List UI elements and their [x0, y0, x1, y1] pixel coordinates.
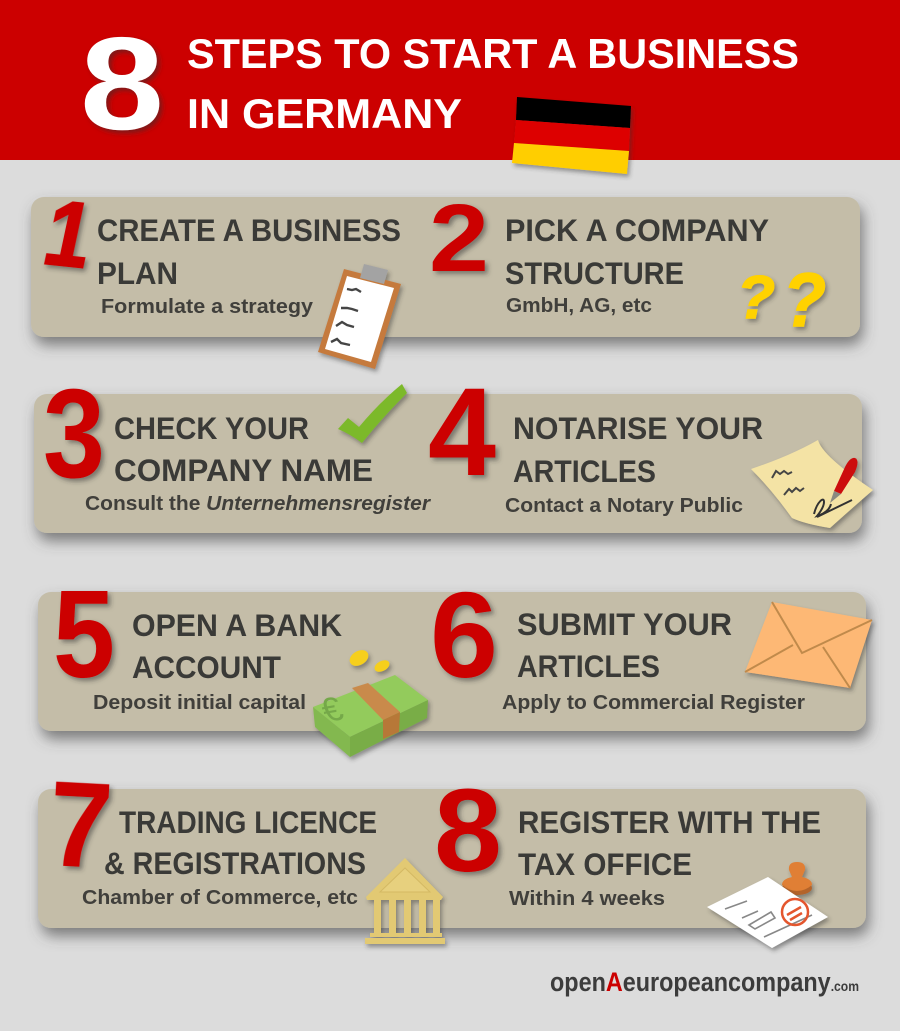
step 6: ARTICLES — [517, 648, 660, 684]
title — [187, 30, 799, 137]
panel: steps 5 and 6 — [38, 592, 866, 731]
icon: check mark — [338, 384, 407, 443]
step 2: PICK A COMPANY — [505, 212, 769, 248]
icon: bank building — [365, 858, 445, 944]
step 7: 7 — [46, 755, 116, 894]
step 1: 1 — [36, 181, 102, 287]
step 6: Apply to Commercial Register — [502, 691, 805, 714]
icon: envelope — [745, 602, 872, 688]
icon: clipboard — [318, 264, 401, 369]
title number: 8 — [80, 10, 164, 157]
step 4: NOTARISE YOUR — [513, 410, 763, 446]
icon: signed paper and pen — [751, 440, 873, 528]
step 5: 5 — [53, 566, 115, 704]
step 8: REGISTER WITH THE — [518, 804, 821, 840]
icon: question marks: ? — [737, 264, 775, 331]
icon: banknotes: € — [316, 691, 349, 729]
step 2: STRUCTURE — [505, 255, 684, 291]
icon: German flag — [512, 97, 631, 174]
step 1: PLAN — [97, 255, 178, 291]
step 2: GmbH, AG, etc — [506, 294, 652, 317]
step 1: Formulate a strategy — [101, 295, 314, 318]
icon: question marks — [737, 258, 826, 343]
step 5: Deposit initial capital — [93, 691, 306, 714]
step 3: CHECK YOUR — [114, 410, 309, 446]
icon: stamped document — [707, 877, 828, 948]
step 4: ARTICLES — [513, 453, 656, 489]
icon: banknotes — [313, 675, 428, 757]
step 3: Consult the Unternehmensregister — [85, 492, 431, 515]
step 1: CREATE A BUSINESS — [97, 212, 401, 248]
step 6 — [430, 567, 805, 714]
panel: steps 1 and 2 — [31, 197, 860, 337]
header banner — [0, 0, 900, 160]
step 4 — [428, 363, 763, 517]
step 1 — [36, 181, 401, 318]
icon: coins — [347, 647, 391, 674]
step 6: SUBMIT YOUR — [517, 606, 732, 642]
step 4: 4 — [428, 363, 496, 502]
step 3: 3 — [43, 363, 105, 504]
step 7: Chamber of Commerce, etc — [82, 886, 358, 909]
step 8 — [434, 765, 821, 910]
panel: steps 3 and 4 — [34, 394, 862, 533]
step 5 — [53, 566, 342, 714]
step 8: TAX OFFICE — [518, 846, 692, 882]
icon: stamp — [782, 862, 812, 895]
step 3: COMPANY NAME — [114, 452, 373, 488]
step 7: & REGISTRATIONS — [104, 845, 366, 881]
step 4: Contact a Notary Public — [505, 494, 743, 517]
title: STEPS TO START A BUSINESS — [187, 30, 799, 77]
step 7 — [46, 755, 377, 909]
step 8: 8 — [434, 765, 502, 897]
step 2: 2 — [429, 185, 489, 292]
step 8: Within 4 weeks — [509, 887, 665, 910]
icon: question marks: ? — [783, 258, 826, 343]
step 3 — [43, 363, 431, 515]
step 7: TRADING LICENCE — [119, 804, 377, 840]
step 2 — [429, 185, 769, 317]
panel: steps 7 and 8 — [38, 789, 866, 928]
step 6: 6 — [430, 567, 498, 703]
step 5: ACCOUNT — [132, 649, 281, 685]
step 5: OPEN A BANK — [132, 607, 342, 643]
footer logo: openAeuropeancompany.com — [550, 967, 859, 997]
title: IN GERMANY — [187, 90, 462, 137]
